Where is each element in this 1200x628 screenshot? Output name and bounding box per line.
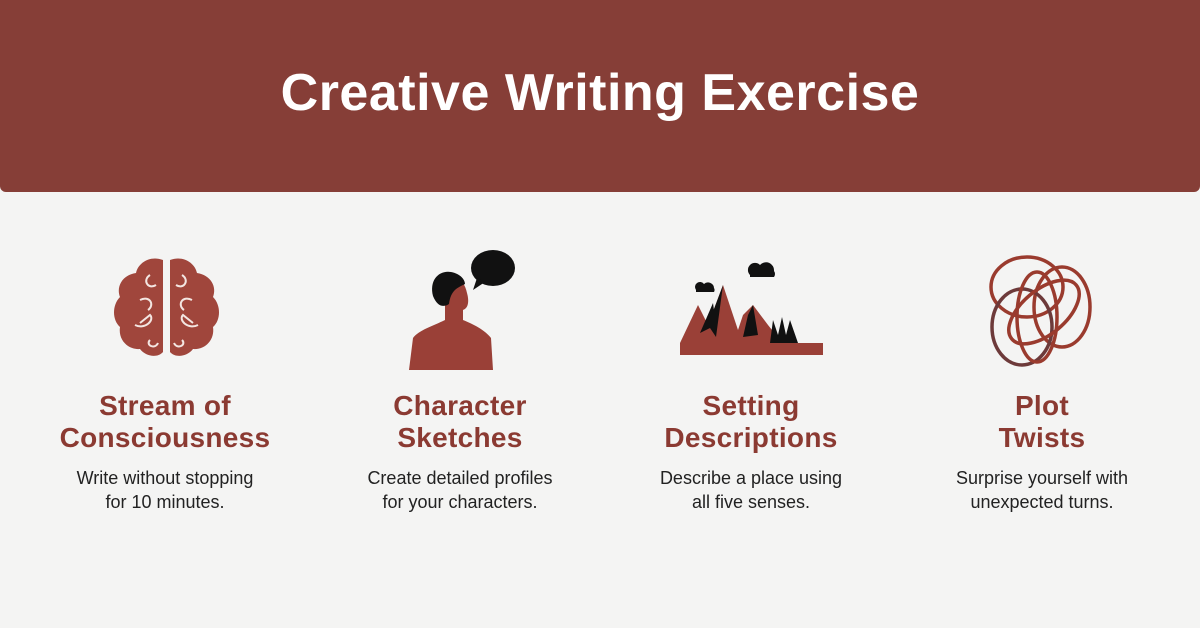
- column: plot twists: unexpected turns.: [970, 492, 1114, 512]
- column: stream of consciousness: for 10 minutes.: [105, 492, 225, 512]
- column: stream of consciousness: [60, 390, 270, 512]
- icon: person with speech bubble: [409, 250, 515, 370]
- column: setting descriptions: Setting: [702, 390, 799, 421]
- column: character sketches: for your characters.: [382, 492, 538, 512]
- column: plot twists: Twists: [999, 422, 1085, 453]
- column: plot twists: Plot: [1015, 390, 1069, 421]
- column: setting descriptions: [660, 390, 842, 512]
- header banner: [0, 0, 1200, 192]
- column: stream of consciousness: Write without stopping: [77, 468, 253, 488]
- column: setting descriptions: all five senses.: [692, 492, 810, 512]
- column: character sketches: Create detailed profiles: [367, 468, 553, 488]
- column: setting descriptions: Descriptions: [664, 422, 838, 453]
- title: Creative Writing Exercise: [281, 64, 919, 122]
- icon: brain: [114, 258, 219, 356]
- column: character sketches: [367, 390, 553, 512]
- column: stream of consciousness: Consciousness: [60, 422, 270, 453]
- column: character sketches: Sketches: [397, 422, 523, 453]
- column: plot twists: [956, 390, 1128, 512]
- column: stream of consciousness: Stream of: [99, 390, 231, 421]
- column: plot twists: Surprise yourself with: [956, 468, 1128, 488]
- column: character sketches: Character: [393, 390, 527, 421]
- column: setting descriptions: Describe a place using: [660, 468, 842, 488]
- icon: overlapping loops: [989, 255, 1092, 367]
- icon: mountains: [680, 262, 823, 355]
